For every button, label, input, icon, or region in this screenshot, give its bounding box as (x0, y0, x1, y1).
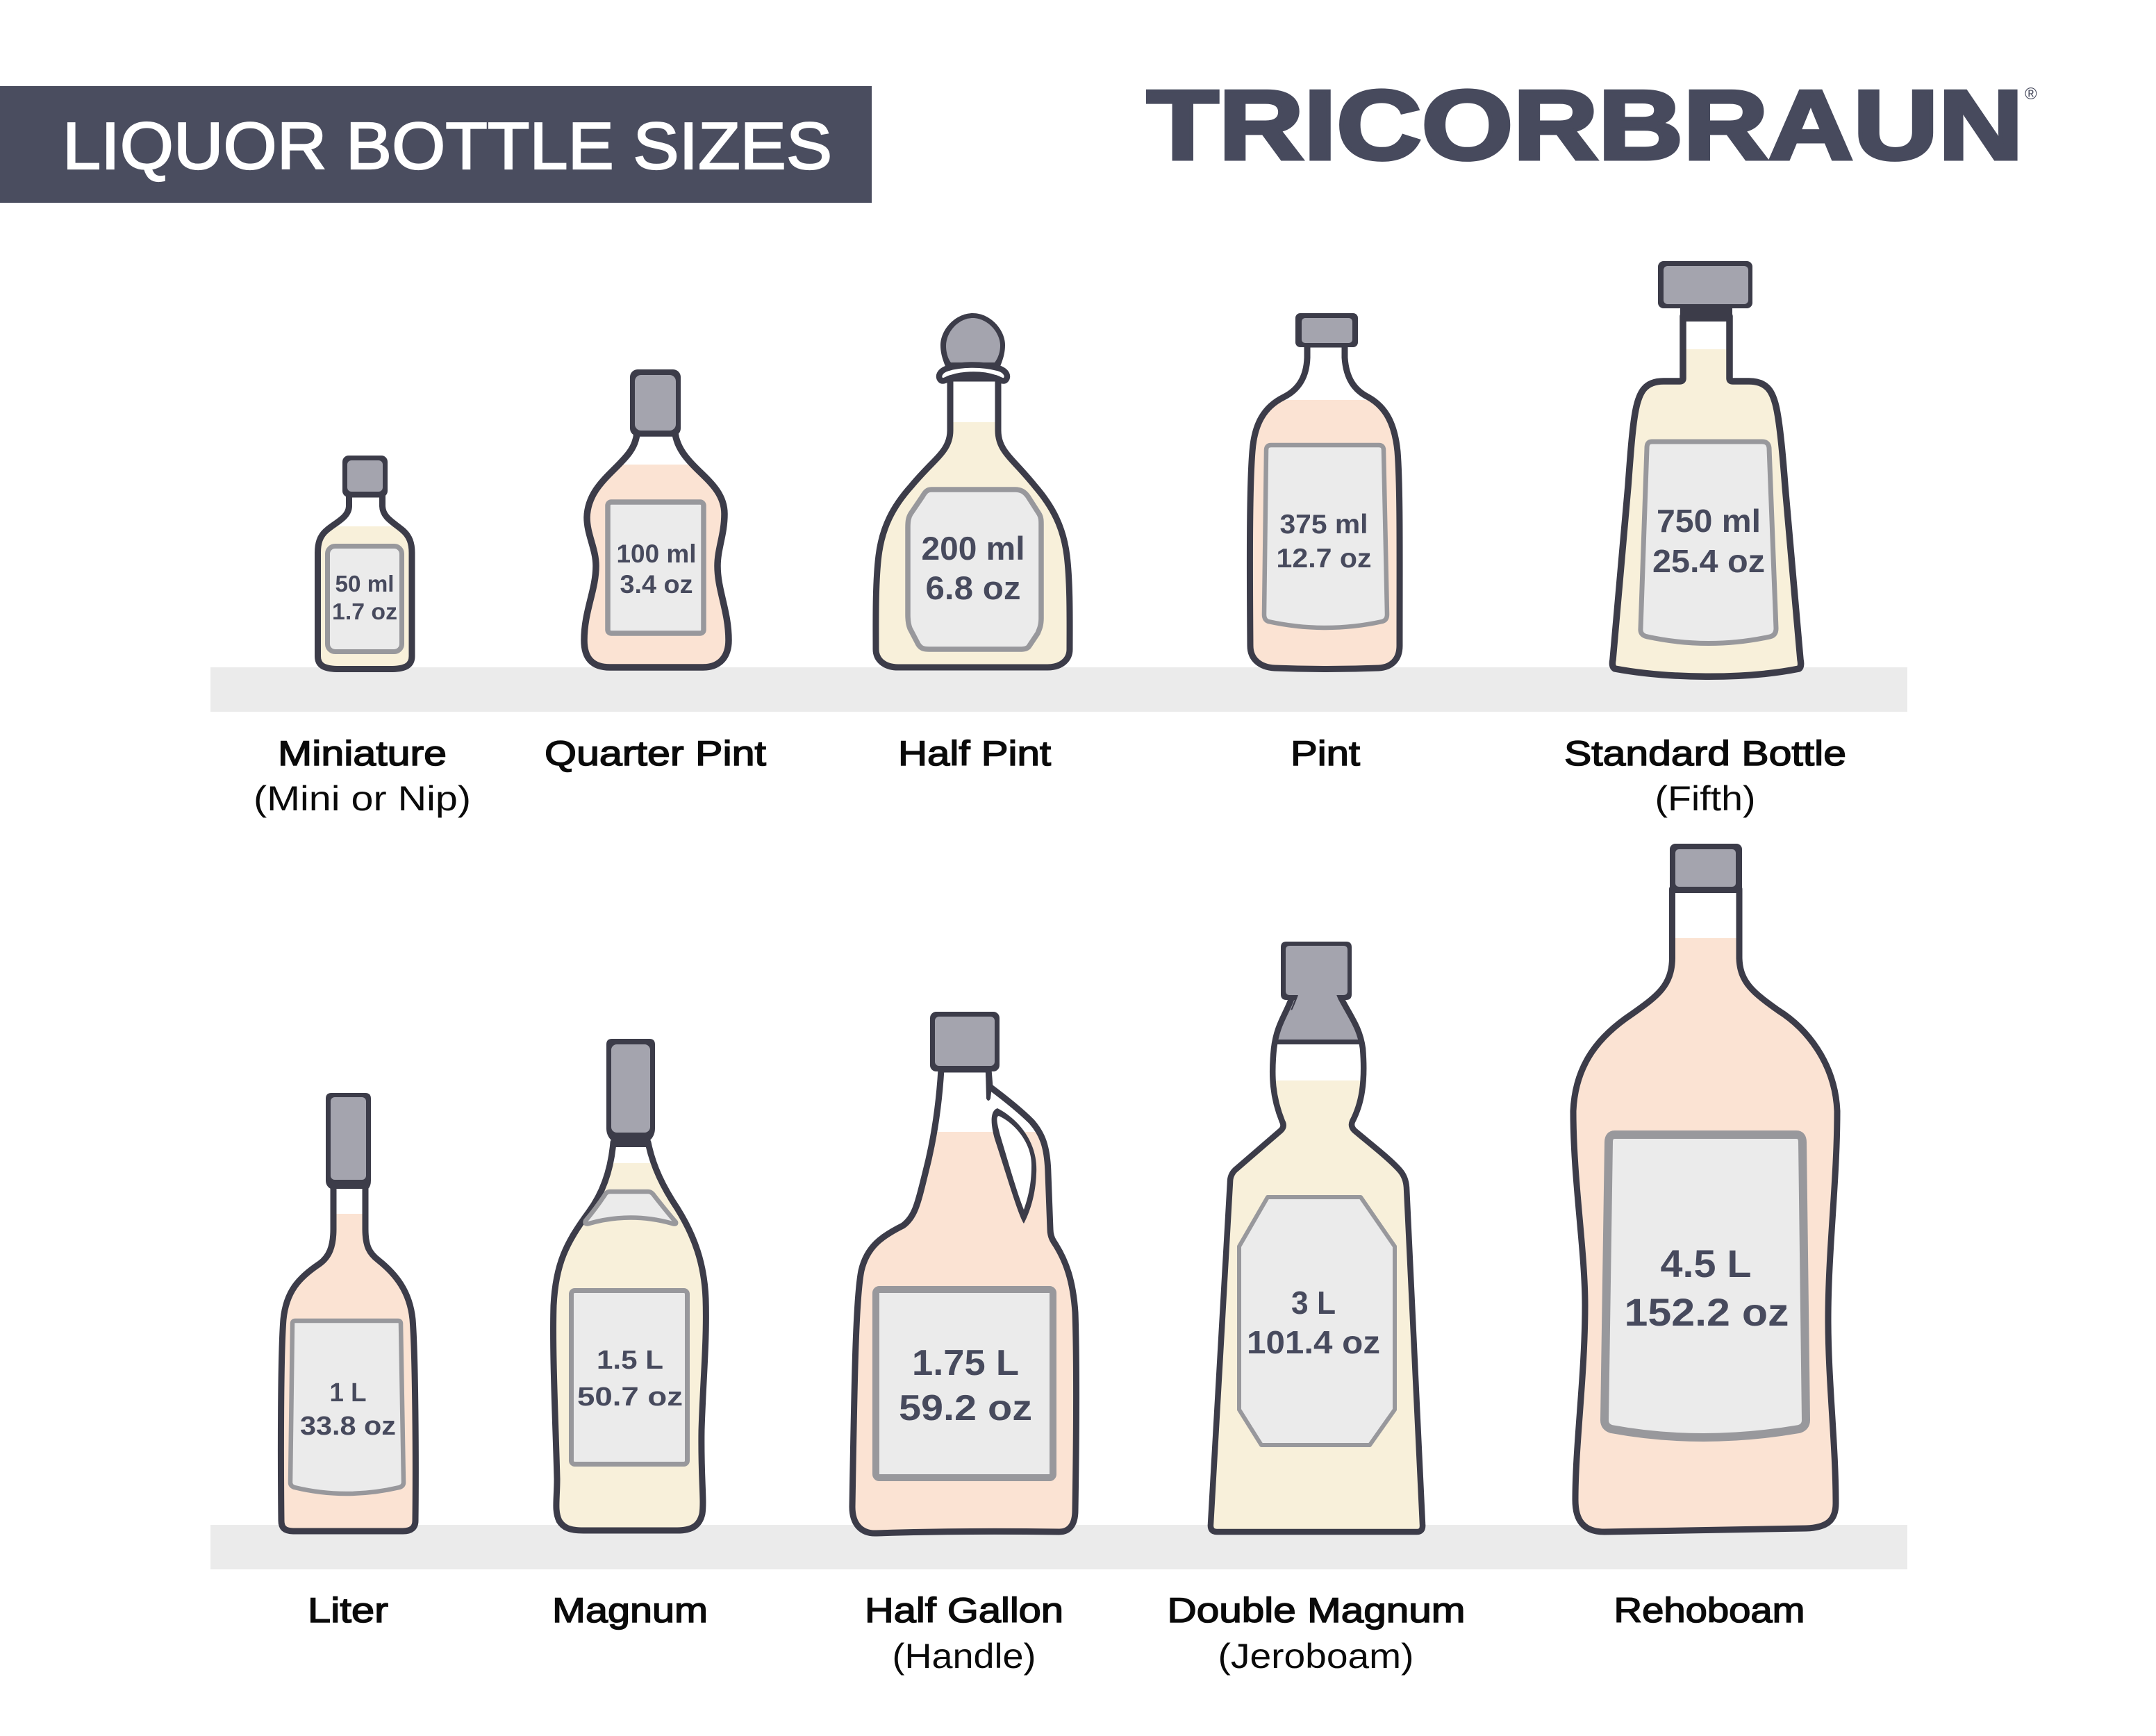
bottle: Standard Bottle 750 ml: 750 ml (1657, 503, 1761, 539)
bottle: Half Gallon 1.75 L with handle: 59.2 oz (899, 1388, 1032, 1428)
bottle: Magnum 1.5 L: 1.5 L (597, 1346, 663, 1375)
shelf: bottom row (210, 1525, 1907, 1569)
bottle: Quarter Pint 100 ml (584, 369, 729, 667)
name label: Double Magnum: Double Magnum (1167, 1591, 1466, 1630)
bottle: Magnum 1.5 L (554, 1039, 706, 1530)
bottle: Half Gallon 1.75 L with handle (852, 1012, 1077, 1533)
logo: TricorBraun: TRICORBRAUN (1147, 70, 2023, 181)
bottle: Standard Bottle 750 ml (1612, 261, 1801, 676)
bottle: Liter 1 L (281, 1093, 415, 1531)
bottle: Rehoboam 4.5 L: 4.5 L (1660, 1242, 1752, 1285)
name label: Pint: Pint (1291, 734, 1360, 773)
name label: Half Gallon: Half Gallon (865, 1591, 1063, 1630)
name label: Miniature (254, 734, 471, 818)
logo: TricorBraun: ® (2025, 85, 2037, 103)
name label: Double Magnum: (Jeroboam) (1218, 1637, 1414, 1676)
name label: Half Pint: Half Pint (898, 734, 1051, 773)
title banner: LIQUOR BOTTLE SIZES (63, 109, 832, 183)
bottle: Liter 1 L: 33.8 oz (300, 1412, 396, 1441)
name label: Liter: Liter (308, 1591, 388, 1630)
name label: Half Gallon (865, 1591, 1063, 1676)
bottle: Magnum 1.5 L: 50.7 oz (577, 1383, 683, 1412)
name label: Standard Bottle (1564, 734, 1846, 818)
name label: Magnum: Magnum (552, 1591, 708, 1630)
name label: Standard Bottle: (Fifth) (1655, 779, 1756, 818)
bottle: Pint 375 ml: 12.7 oz (1277, 544, 1371, 574)
bottle: Liter 1 L: 1 L (329, 1378, 367, 1408)
shelf: top row (210, 667, 1907, 712)
bottle: Miniature 50 ml (318, 456, 412, 669)
bottle: Rehoboam 4.5 L (1573, 844, 1837, 1532)
bottle: Half Pint 200 ml: 6.8 oz (925, 569, 1021, 606)
bottle: Double Magnum 3 L (1211, 942, 1423, 1532)
bottle: Double Magnum 3 L: 101.4 oz (1247, 1324, 1380, 1360)
name label: Quarter Pint: Quarter Pint (545, 734, 766, 773)
name label: Standard Bottle: Standard Bottle (1564, 734, 1846, 773)
bottle: Pint 375 ml: 375 ml (1279, 510, 1368, 540)
title banner (0, 86, 872, 203)
bottle: Miniature 50 ml: 50 ml (335, 571, 395, 596)
bottle: Quarter Pint 100 ml: 3.4 oz (620, 570, 693, 599)
bottle: Half Pint 200 ml (876, 313, 1070, 667)
bottle: Pint 375 ml (1250, 313, 1400, 669)
bottle: Half Gallon 1.75 L with handle: 1.75 L (912, 1343, 1019, 1383)
name label: Double Magnum (1167, 1591, 1466, 1676)
name label: Miniature: Miniature (278, 734, 447, 773)
bottle: Standard Bottle 750 ml: 25.4 oz (1652, 543, 1765, 579)
bottle: Double Magnum 3 L: 3 L (1291, 1285, 1336, 1321)
bottle: Miniature 50 ml: 1.7 oz (332, 599, 397, 624)
name label: Half Gallon: (Handle) (892, 1637, 1036, 1676)
bottle: Half Pint 200 ml: 200 ml (921, 530, 1025, 567)
name label: Miniature: (Mini or Nip) (254, 779, 471, 818)
bottle: Rehoboam 4.5 L: 152.2 oz (1624, 1290, 1789, 1334)
bottle: Quarter Pint 100 ml: 100 ml (617, 540, 696, 568)
name label: Rehoboam: Rehoboam (1614, 1591, 1805, 1630)
